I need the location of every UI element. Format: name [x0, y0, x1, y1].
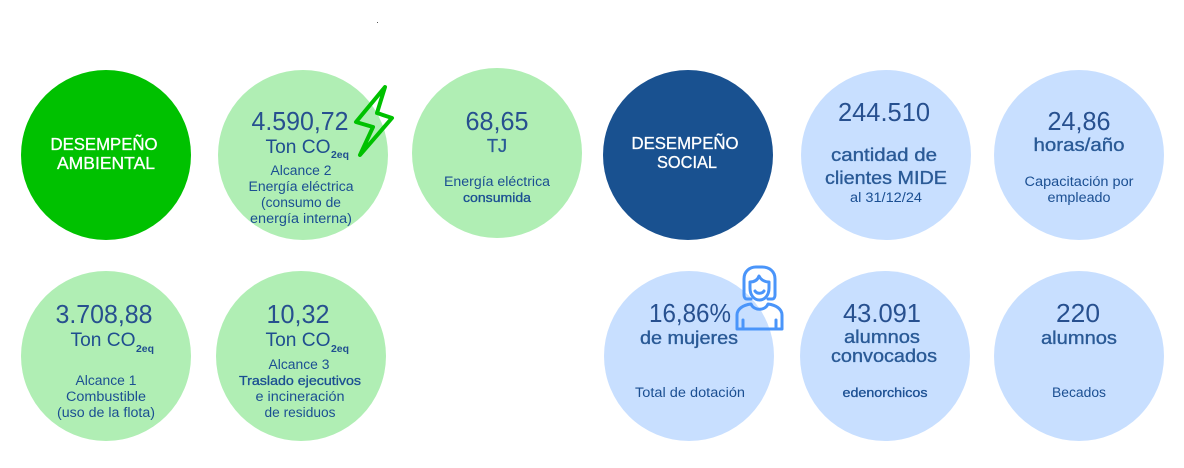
panel: alcance 3: Alcance 3	[268, 357, 330, 372]
panel: alcance 1: 3.708,88	[56, 299, 152, 329]
panel: clientes MIDE	[801, 70, 971, 240]
panel: alumnos convocados	[800, 271, 970, 441]
panel: becados: alumnos	[1041, 327, 1117, 348]
panel: alcance 2: (consumo de	[261, 195, 341, 210]
panel: mujeres: 16,86%	[649, 298, 731, 328]
panel: clientes MIDE: 244.510	[838, 97, 930, 127]
panel: clientes MIDE: clientes MIDE	[825, 167, 947, 188]
panel: alcance 2: energía interna)	[250, 211, 352, 226]
panel: capacitación: Capacitación por	[1024, 174, 1134, 189]
panel: alcance 3	[216, 271, 386, 441]
panel: alcance 1: Alcance 1	[76, 373, 136, 388]
panel: capacitación: empleado	[1048, 190, 1110, 205]
panel: alcance 2: Ton CO	[266, 137, 330, 158]
panel: alcance 3: Ton CO	[266, 330, 330, 351]
panel: alcance 3: e incineración	[256, 389, 344, 404]
panel: alcance 3: 10,32	[266, 299, 330, 329]
panel: alcance 1: Combustible	[66, 389, 146, 404]
panel: desempeño ambiental: AMBIENTAL	[57, 153, 155, 173]
panel: becados	[994, 271, 1164, 441]
panel: alcance 2: 2eq	[331, 149, 349, 161]
panel: desempeño social	[603, 70, 773, 240]
panel: desempeño social: SOCIAL	[657, 152, 717, 172]
panel: becados: 220	[1056, 298, 1100, 328]
panel: alcance 1: 2eq	[136, 343, 154, 355]
panel: alcance 3: Traslado ejecutivos	[239, 373, 362, 388]
panel: desempeño social: DESEMPEÑO	[632, 132, 738, 153]
panel: energía consumida: consumida	[463, 190, 532, 205]
decorative speck	[377, 22, 378, 23]
panel: clientes MIDE: al 31/12/24	[850, 190, 923, 205]
icon: woman	[737, 267, 782, 329]
panel: alumnos convocados: convocados	[831, 345, 937, 366]
panel: alcance 2	[218, 70, 388, 240]
panel: mujeres: Total de dotación	[635, 385, 745, 400]
panel: alcance 1: Ton CO	[70, 330, 136, 351]
panel: capacitación: 24,86	[1048, 106, 1110, 136]
panel: capacitación	[994, 70, 1164, 240]
panel: energía consumida: 68,65	[466, 106, 528, 136]
panel: alcance 1	[21, 271, 191, 441]
panel: alumnos convocados: 43.091	[843, 298, 921, 328]
panel: alcance 3: de residuos	[264, 405, 336, 420]
panel: alcance 2: Energía eléctrica	[248, 179, 354, 194]
panel: energía consumida	[412, 68, 582, 238]
panel: capacitación: horas/año	[1034, 134, 1124, 155]
panel: becados: Becados	[1052, 385, 1106, 400]
panel: mujeres	[604, 271, 774, 441]
panel: alumnos convocados: alumnos	[844, 326, 920, 347]
panel: alcance 1: (uso de la flota)	[57, 405, 155, 420]
icon: lightning bolt	[356, 87, 392, 155]
panel: desempeño ambiental	[21, 70, 191, 240]
panel: clientes MIDE: cantidad de	[831, 144, 937, 165]
panel: mujeres: de mujeres	[640, 327, 738, 348]
panel: alcance 2: Alcance 2	[270, 163, 332, 178]
panel: alumnos convocados: edenorchicos	[842, 385, 928, 400]
panel: energía consumida: TJ	[487, 135, 507, 156]
panel: desempeño ambiental: DESEMPEÑO	[50, 133, 158, 154]
panel: energía consumida: Energía eléctrica	[444, 174, 551, 189]
panel: alcance 3: 2eq	[331, 343, 349, 355]
panel: alcance 2: 4.590,72	[252, 106, 348, 136]
